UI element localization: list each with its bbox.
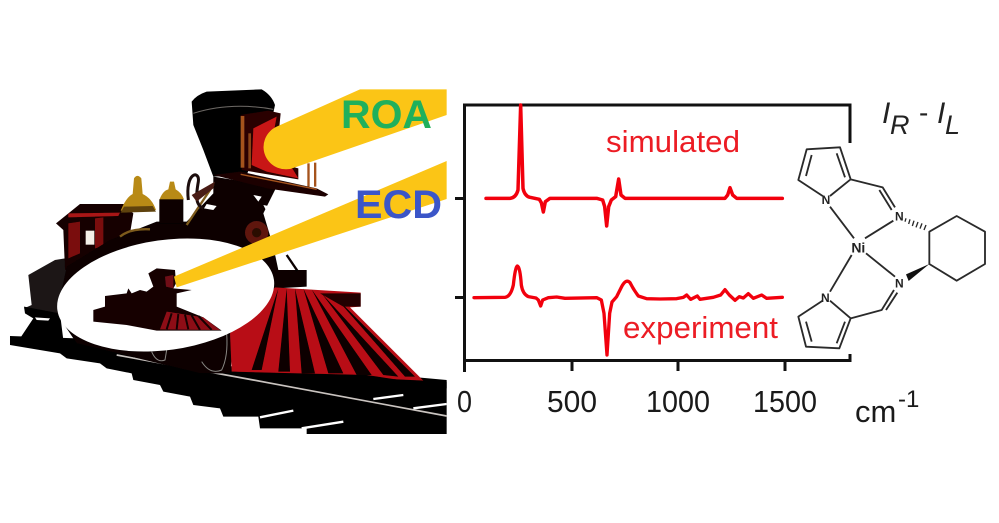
y-axis label: I: [882, 97, 890, 130]
x-axis tick labels: 1000: [646, 384, 710, 419]
y-axis label: I: [937, 97, 945, 130]
label: experiment: experiment: [623, 310, 778, 345]
smokestack: [192, 89, 275, 177]
x-axis unit: cm: [855, 394, 896, 429]
y-axis label: L: [945, 110, 960, 140]
label: simulated: simulated: [606, 124, 740, 159]
panel: locomotive illustration: [10, 89, 447, 434]
atom labels: N: [821, 291, 830, 305]
hashed wedge bond: [905, 218, 926, 230]
atom labels: N: [822, 193, 830, 207]
solid wedge bond: [906, 264, 929, 281]
x-axis tick labels: 1500: [753, 384, 817, 419]
atom labels: Ni: [851, 239, 865, 255]
gold domes: [121, 176, 184, 223]
yellow beam to small locomotive: [174, 161, 447, 287]
curve: simulated spectrum: [486, 105, 782, 226]
tender: [20, 258, 70, 340]
cowcatcher: [230, 287, 447, 388]
boiler and frame: [57, 175, 307, 373]
x-axis unit: [855, 386, 919, 429]
white ellipse spotlight: [50, 225, 282, 365]
atom labels: N: [895, 276, 904, 290]
y-axis label: R: [890, 110, 910, 140]
yellow beam to large locomotive: [264, 89, 447, 169]
bonds: [798, 147, 985, 348]
small locomotive in ellipse: [93, 268, 222, 331]
chart: spectra: [455, 97, 960, 429]
railway track: [10, 336, 447, 434]
y-axis label: [882, 97, 960, 140]
label: ROA: ROA: [341, 93, 432, 137]
label: ECD: ECD: [355, 183, 442, 227]
atom labels: N: [895, 210, 904, 224]
y-axis label: -: [919, 97, 928, 128]
x-axis unit: -1: [898, 386, 919, 413]
curve: experimental spectrum: [474, 266, 782, 355]
chart frame and axes: [455, 105, 850, 372]
x-axis tick labels: [457, 384, 817, 419]
cab: [56, 204, 133, 270]
molecule: nickel complex: [798, 147, 985, 348]
atom labels: [821, 193, 904, 305]
headlamp: [213, 111, 328, 197]
x-axis tick labels: 0: [457, 384, 472, 419]
x-axis tick labels: 500: [547, 384, 597, 419]
